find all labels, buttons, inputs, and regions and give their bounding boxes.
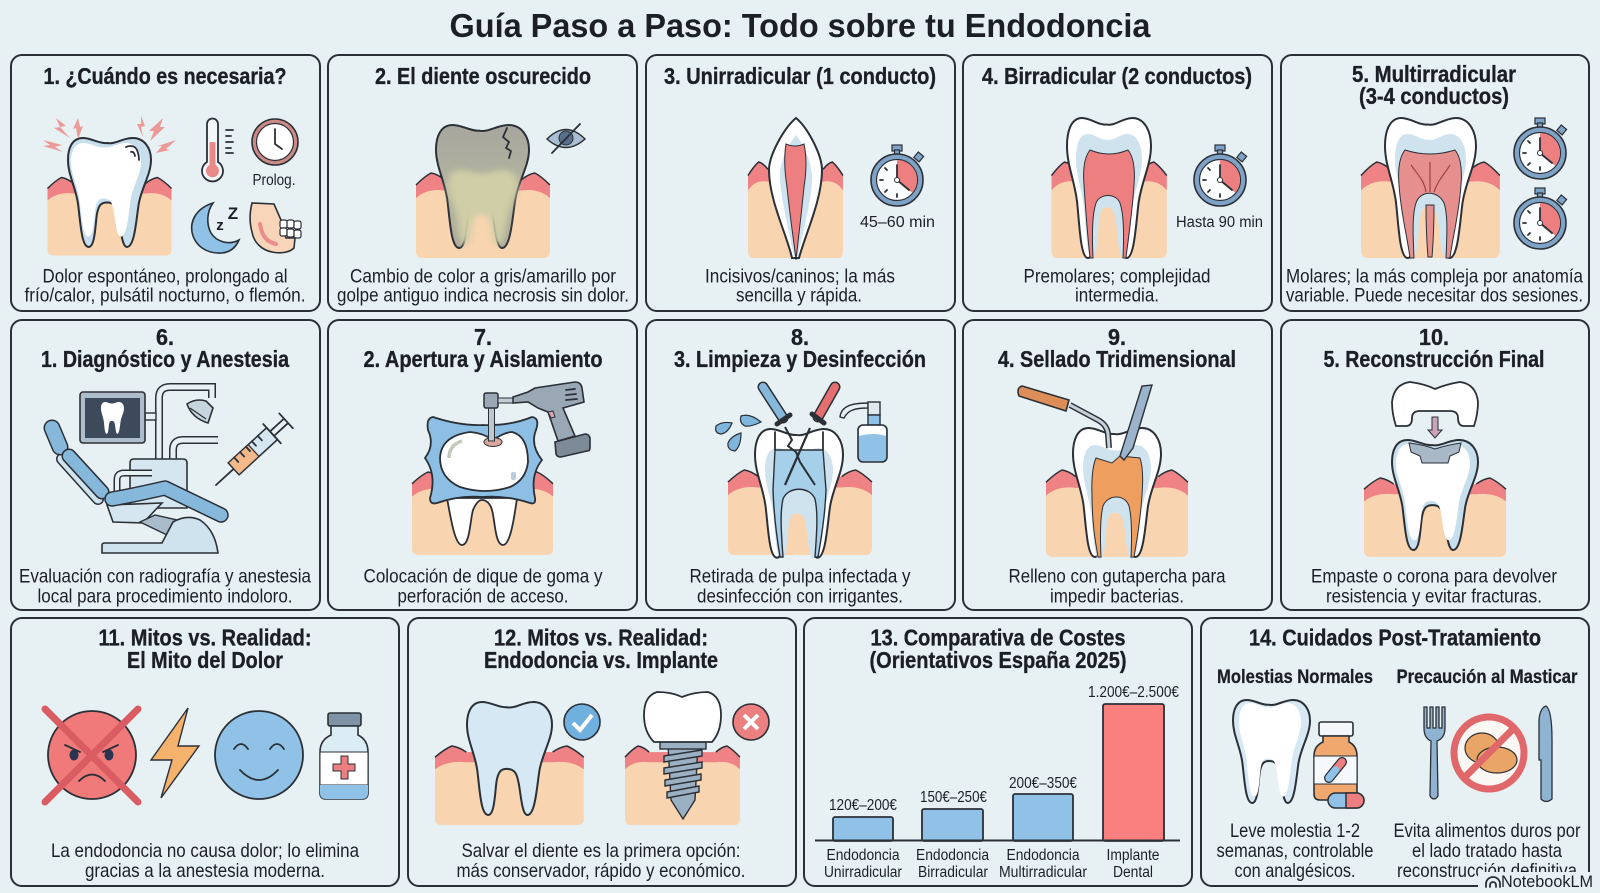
description 4: Premolares; complejidad [1024,266,1210,288]
heading 10 [1324,324,1544,372]
heading 3: 3. Unirradicular (1 conducto) [664,63,936,89]
heading 9: 4. Sellado Tridimensional [998,346,1236,372]
heading 12: 12. Mitos vs. Realidad: [494,624,708,650]
heading 7: 7. [474,324,492,350]
description: precaución [1394,820,1581,882]
description 12: Salvar el diente es la primera opción: [462,840,740,862]
heading 11: 11. Mitos vs. Realidad: [98,624,312,650]
description 10 [1311,566,1557,608]
icon: cross badge [733,704,769,740]
description 11: gracias a la anestesia moderna. [85,860,325,882]
illustration: darkened tooth [416,125,550,258]
illustration: restored tooth [1364,440,1506,557]
icon: moon with z: Z [228,204,238,223]
value labels [829,684,1179,814]
description: precaución: el lado tratado hasta [1412,840,1562,862]
watermark: NotebookLM: NotebookLM [1501,872,1593,891]
panel: 1 cuándo es necesaria [11,55,320,311]
description 1: frío/calor, pulsátil nocturno, o flemón. [24,284,306,306]
icon: moon with z: z [216,217,224,234]
panel: 3 unirradicular [646,55,955,311]
description 10: resistencia y evitar fracturas. [1326,586,1542,608]
description: molestias: semanas, controlable [1216,840,1374,862]
icon: dental drill [484,382,590,457]
heading 7: 2. Apertura y Aislamiento [364,346,602,372]
illustration: implant [625,692,740,825]
description: molestias: Leve molestia 1-2 [1230,820,1360,842]
heading 13: 13. Comparativa de Costes [870,624,1126,650]
icon: lightning bolt [151,708,199,798]
description 7 [364,566,603,608]
description: molestias [1216,820,1374,882]
heading 6 [41,324,289,372]
icon: drops [716,415,761,451]
description 12: más conservador, rápido y económico. [456,860,746,882]
icon: capsule [1328,793,1364,808]
value labels: 1.200€–2.500€ [1088,684,1179,701]
icon: spreader [1120,385,1152,460]
icon: crossed eye [547,124,585,153]
description 2: Cambio de color a gris/amarillo por [350,266,616,288]
heading 11 [98,624,312,673]
description 4 [1024,266,1210,306]
illustration: two-root tooth [1052,118,1167,258]
label: Prolog.: Prolog. [252,172,296,189]
icon: pill bottle [1314,722,1357,800]
heading 8: 8. [791,324,809,350]
description 8: Retirada de pulpa infectada y [690,566,911,588]
description: precaución: reconstrucción definitiva [1397,860,1577,882]
heading 12: Endodoncia vs. Implante [484,647,718,673]
icon: stopwatch bottom [1514,188,1567,249]
category labels: Birradicular [918,864,988,881]
description 9: impedir bacterias. [1050,586,1184,608]
description: molestias: con analgésicos. [1234,860,1356,882]
heading 9 [998,324,1236,372]
panel: 6 diagnóstico [11,320,320,610]
panel: 7 apertura [328,320,637,610]
description 12 [456,840,746,882]
icon: swollen jaw [250,203,301,253]
heading 5 [1352,61,1516,109]
description 8 [690,566,911,608]
heading 13 [870,624,1126,673]
category labels: Dental [1113,864,1153,881]
panel: 9 sellado [963,320,1272,610]
bar: unirradicular [833,817,893,841]
illustration: tooth with pain [43,116,176,256]
panel: 2 diente oscurecido [328,55,637,311]
bar: birradicular [922,809,983,841]
title: Guía Paso a Paso: Todo sobre tu Endodoncia [450,8,1151,45]
heading 2: 2. El diente oscurecido [375,63,591,89]
heading 7 [364,324,602,372]
panel: 11 mito del dolor [11,618,399,886]
panel: 14 cuidados [1201,618,1589,886]
description 3 [705,266,895,306]
illustration: dental chair [52,387,221,553]
heading 6: 1. Diagnóstico y Anestesia [41,346,289,372]
description 10: Empaste o corona para devolver [1311,566,1557,588]
illustration: multi-root tooth [1361,118,1500,258]
heading 9: 9. [1108,324,1126,350]
description 5 [1286,266,1583,306]
description 1: Dolor espontáneo, prolongado al [42,266,288,288]
value labels: 150€–250€ [920,789,987,806]
bar: multirradicular [1013,794,1073,841]
description 3: Incisivos/caninos; la más [705,266,895,288]
heading 10: 10. [1419,324,1449,350]
heading 8: 3. Limpieza y Desinfección [674,346,926,372]
category labels [824,847,1160,881]
description 8: desinfección con irrigantes. [697,586,903,608]
description 11 [51,840,359,882]
heading 11: El Mito del Dolor [127,647,283,673]
icon: knife [1539,706,1552,802]
illustration: sealed tooth [1046,428,1188,559]
description 9 [1008,566,1226,608]
heading 8 [674,324,926,372]
description 6: local para procedimiento indoloro. [38,586,292,608]
description 4: intermedia. [1075,284,1159,306]
heading 4: 4. Birradicular (2 conductos) [982,63,1252,89]
panel: 4 birradicular [963,55,1272,311]
subheading: molestias: Molestias Normales [1217,666,1373,688]
category labels: Endodoncia [1006,847,1080,864]
category labels: Multirradicular [999,864,1087,881]
icon: angry face crossed [45,709,138,802]
illustration: natural tooth [435,702,584,825]
panel: 5 multirradicular [1281,55,1589,311]
icon: stopwatch [871,145,924,206]
description 6 [19,566,311,608]
heading 1: 1. ¿Cuándo es necesaria? [44,63,286,89]
heading 14: 14. Cuidados Post-Tratamiento [1249,624,1541,650]
icon: plugger [1018,386,1109,448]
heading 12 [484,624,718,673]
panel: 8 limpieza [646,320,955,610]
icon: thermometer [202,119,233,181]
illustration: tooth irrigated with files [728,427,872,558]
illustration: tooth [1233,700,1310,803]
illustration: tooth with rubber dam [412,417,553,555]
axis [815,840,1180,842]
value labels: 120€–200€ [829,797,897,814]
description 1 [24,266,306,306]
illustration: crown [1392,382,1478,426]
icon: syringe [207,411,295,495]
icon: fork [1424,707,1445,799]
icon: stopwatch [1194,145,1247,206]
category labels: Unirradicular [824,864,902,881]
icon: smiling face [215,711,303,799]
icon: stopwatch top [1514,118,1567,179]
icon: blue file [763,387,790,424]
description 3: sencilla y rápida. [736,284,862,306]
panel: 12 endodoncia vs implante [408,618,796,886]
heading 10: 5. Reconstrucción Final [1324,346,1544,372]
description 9: Relleno con gutapercha para [1008,566,1226,588]
heading 5: 5. Multirradicular [1352,61,1516,87]
icon: medicine bottle [320,713,368,799]
icon: moon with z [192,203,239,253]
description 11: La endodoncia no causa dolor; lo elimina [51,840,359,862]
heading 5: (3-4 conductos) [1359,83,1509,109]
category labels: Endodoncia [826,847,900,864]
label: time: Hasta 90 min [1176,214,1263,231]
bar: implante [1103,704,1164,841]
description 7: Colocación de dique de goma y [364,566,603,588]
description 6: Evaluación con radiografía y anestesia [19,566,311,588]
icon: clock [252,119,298,165]
panel: 13 costes [804,618,1192,886]
label: time: 45–60 min [860,214,935,231]
icon: irrigant bottle [840,402,887,462]
icon: red file [812,387,835,423]
value labels: 200€–350€ [1009,775,1077,792]
description 7: perforación de acceso. [398,586,568,608]
illustration: single-root tooth [748,118,843,260]
icon: forbidden food [1452,715,1526,791]
bar chart: costs [815,684,1180,881]
heading 13: (Orientativos España 2025) [870,647,1126,673]
description 2 [337,266,629,306]
icon: check badge [564,704,600,740]
category labels: Implante [1106,847,1160,864]
description 2: golpe antiguo indica necrosis sin dolor. [337,284,629,306]
heading 6: 6. [156,324,174,350]
category labels: Endodoncia [916,847,989,864]
arrow: crown to tooth [1428,417,1442,438]
panel: 10 reconstrucción [1281,320,1589,610]
